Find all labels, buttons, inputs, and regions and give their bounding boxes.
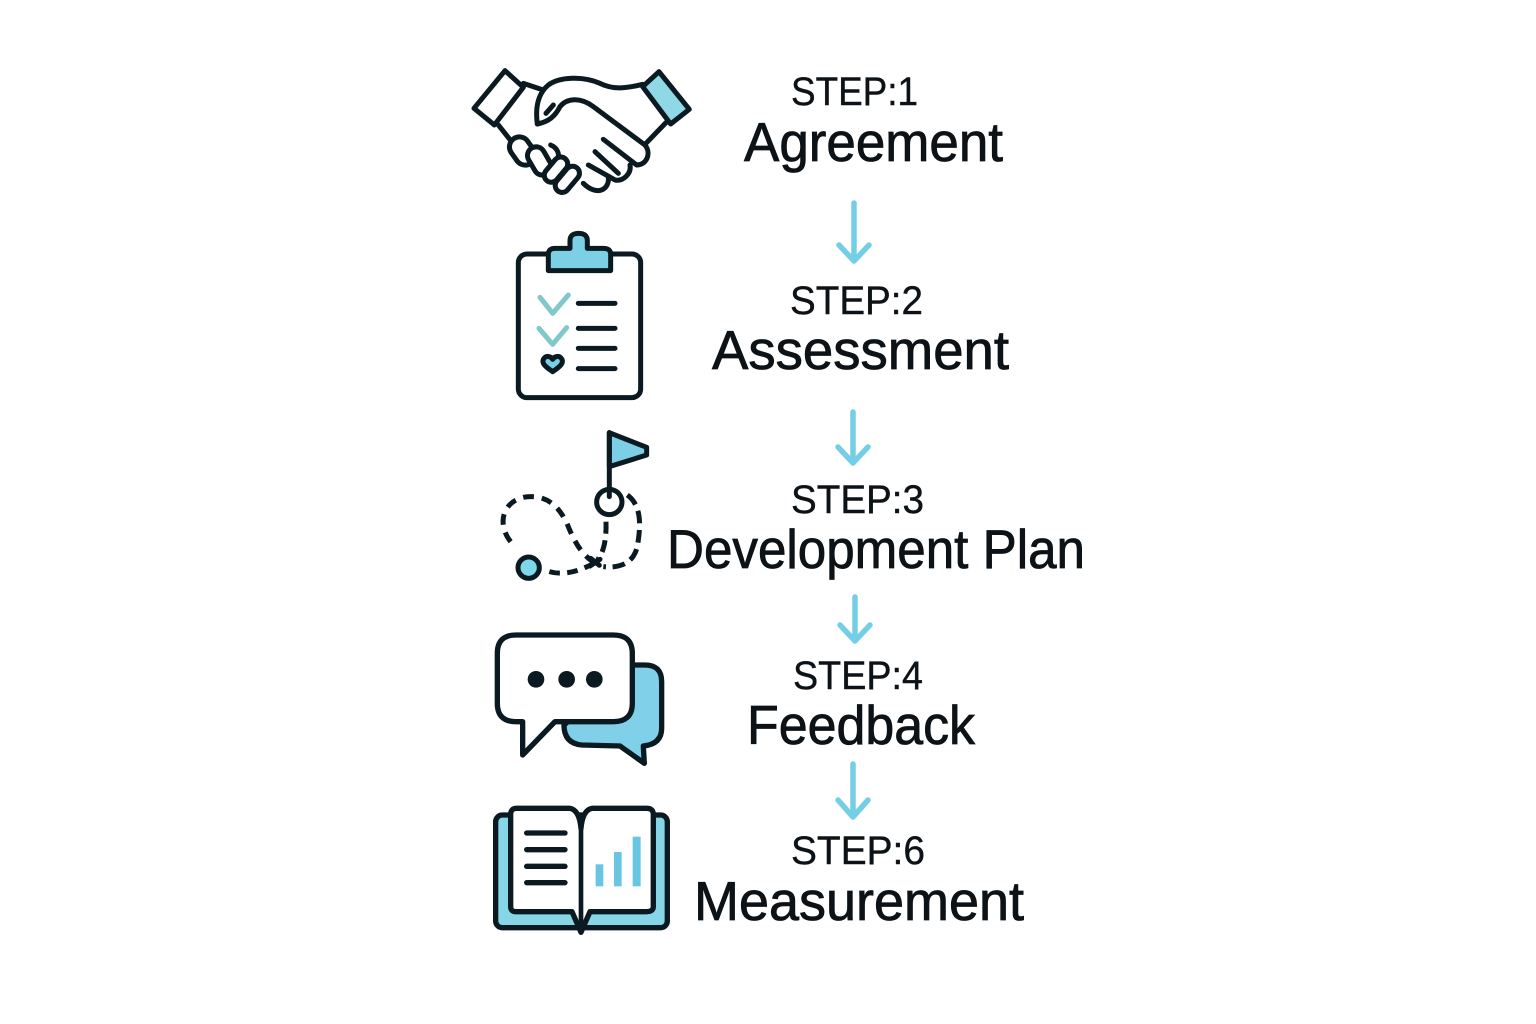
icon: open book with chart bbox=[496, 808, 667, 932]
step 2 label: STEP:2 bbox=[790, 279, 923, 323]
step 4 label: Feedback bbox=[747, 694, 975, 756]
step 4 label bbox=[747, 654, 975, 756]
step 6 label: Measurement bbox=[694, 870, 1024, 932]
step 6 label: STEP:6 bbox=[791, 829, 925, 873]
step 6 label bbox=[694, 829, 1024, 932]
step 2 label bbox=[712, 279, 1009, 381]
arrow: step 4 to 6 bbox=[838, 764, 868, 817]
arrow: step 3 to 4 bbox=[840, 597, 870, 641]
step 4 label: STEP:4 bbox=[793, 654, 923, 698]
step 3 label bbox=[667, 478, 1085, 580]
icon: dashed route to flag bbox=[503, 433, 647, 578]
step 1 label bbox=[744, 70, 1003, 173]
step 1 label: Agreement bbox=[744, 111, 1003, 173]
step 3 label: STEP:3 bbox=[791, 478, 924, 522]
arrow: step 1 to 2 bbox=[839, 203, 869, 261]
icon: speech bubbles bbox=[497, 635, 662, 763]
icon: clipboard checklist bbox=[518, 233, 641, 398]
step 1 label: STEP:1 bbox=[791, 70, 918, 114]
step 2 label: Assessment bbox=[712, 319, 1009, 381]
icon: handshake bbox=[474, 71, 689, 195]
arrow: step 2 to 3 bbox=[838, 412, 868, 463]
step 3 label: Development Plan bbox=[667, 518, 1085, 580]
